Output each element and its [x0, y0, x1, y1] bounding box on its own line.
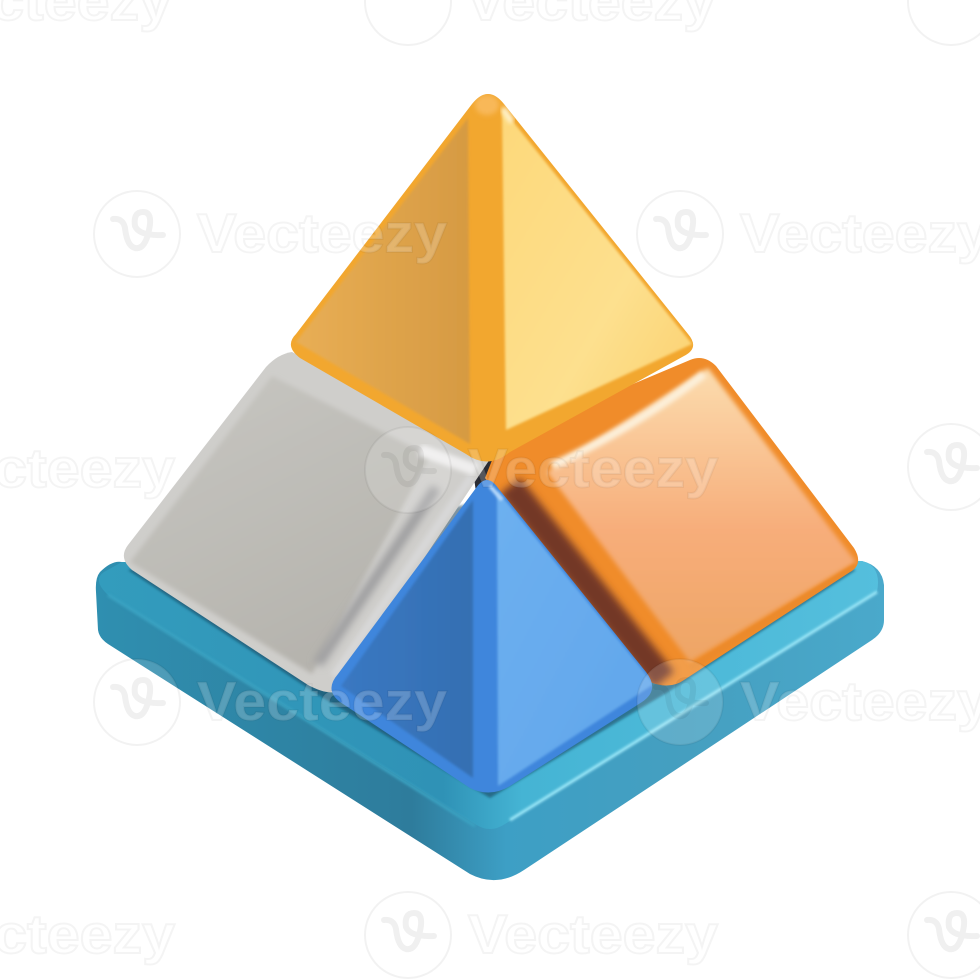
watermark overlay: Vecteezy — [197, 670, 447, 732]
watermark overlay: Vecteezy — [468, 903, 718, 965]
yellow left face — [296, 118, 470, 444]
grey block — [110, 345, 495, 700]
orange front face — [547, 368, 856, 662]
watermark overlay: Vecteezy — [197, 202, 447, 264]
block shadows on base — [128, 500, 856, 798]
grey front face — [130, 376, 430, 674]
blue left face — [341, 500, 473, 778]
base top face — [99, 561, 878, 829]
yellow right face — [502, 108, 692, 430]
base side — [90, 555, 890, 890]
watermark overlay: Vecteezy — [468, 437, 718, 499]
blue right face — [497, 490, 654, 786]
watermark overlay: Vecteezy — [740, 670, 980, 732]
yellow block — [280, 85, 700, 470]
orange block — [485, 358, 858, 686]
base plate — [90, 555, 890, 890]
watermark overlay: Vecteezy — [740, 202, 980, 264]
dark gap at block junction — [470, 450, 512, 492]
orange shaded side — [510, 486, 664, 680]
blue block — [332, 480, 652, 792]
